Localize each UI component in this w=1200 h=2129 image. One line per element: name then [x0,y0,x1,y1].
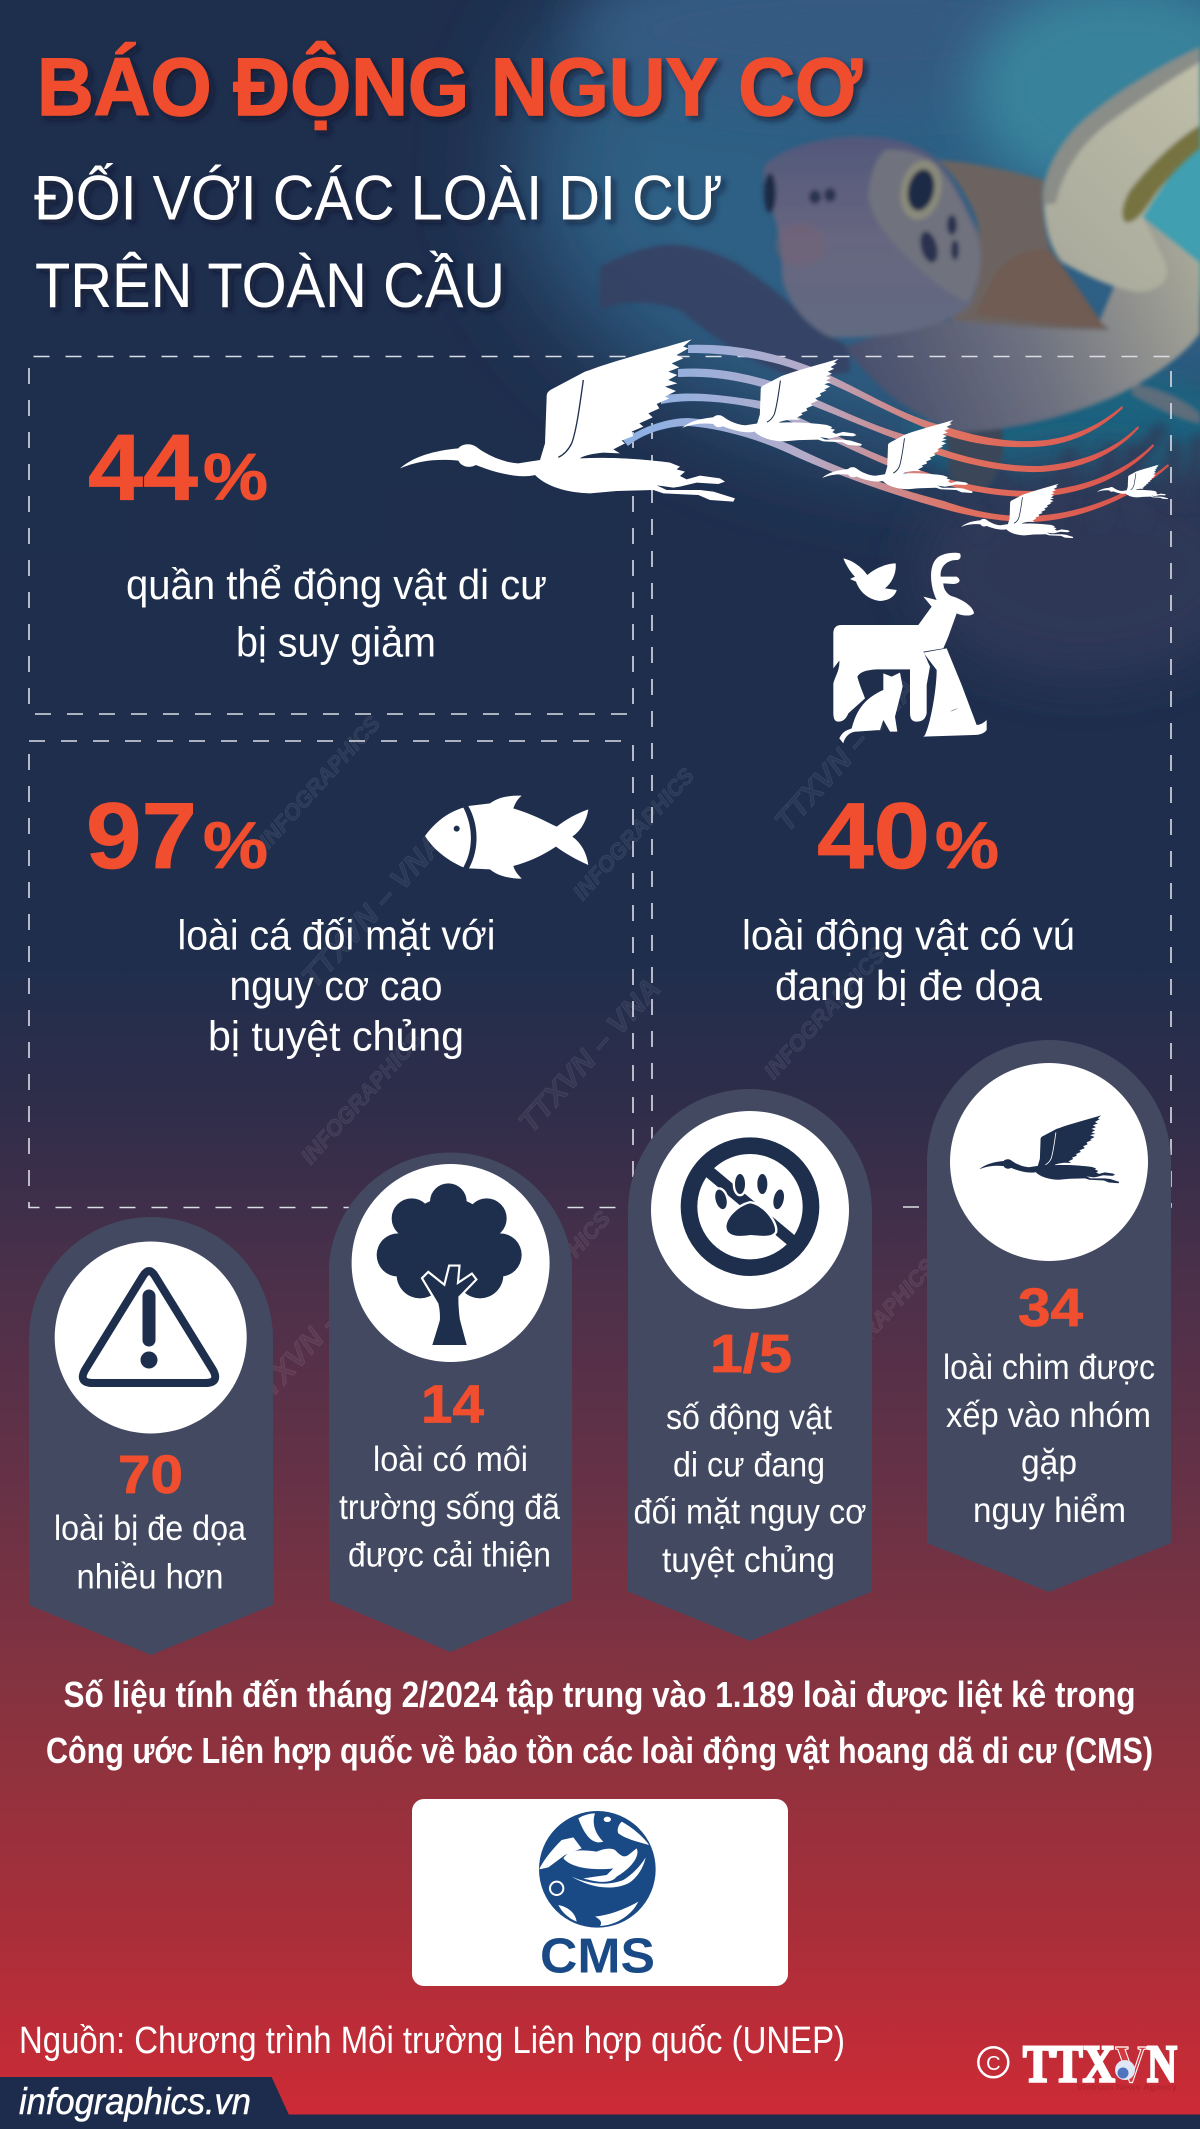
stat: 40% mammals threatened [742,783,1075,1009]
stat: 97% fish species at risk: % [203,808,268,882]
stat: 97% fish species at risk: 97 [86,783,197,888]
card: 70 species [29,1217,273,1655]
flight streaks behind the birds [623,345,1169,522]
logo: TTXVN [978,2036,1178,2094]
stat: 40% mammals threatened: loài động vật có vú [742,912,1075,959]
logo: TTXVN: V [1115,2036,1147,2094]
photo: sea turtle underwater [520,0,1200,680]
card: 34 bird species: gặp [1021,1443,1077,1482]
watermarks: INFOGRAPHICS [484,1206,615,1348]
icon: banned paw [651,1111,849,1309]
stat: 97% fish species at risk: nguy cơ cao [230,962,442,1009]
icon: CMS emblem [539,1811,656,1928]
icon: flying bird 4 [961,484,1073,538]
icon: warning triangle [55,1242,247,1434]
stat: 97% fish species at risk: loài cá đối mặt với [178,912,496,959]
card: 70 species: nhiều hơn [76,1558,224,1596]
card: 14 species: được cải thiện [348,1536,551,1574]
card: 1/5 of migratory animals: tuyệt chủng [662,1541,835,1580]
card: 34 bird species: xếp vào nhóm [946,1396,1151,1435]
footer bar with site name [0,2077,1200,2129]
watermarks: TTXVN – VNA [768,671,923,838]
stat: 40% mammals threatened: 40 [817,783,930,888]
stat: 97% fish species at risk: bị tuyệt chủng [208,1013,464,1060]
title: TRÊN TOÀN CẦU [35,250,505,321]
card: 1/5 of migratory animals: đối mặt nguy cơ [634,1492,866,1532]
panel: CMS logo: CMS [540,1930,655,1984]
icon: flying bird 5 [1097,465,1168,499]
title: BÁO ĐỘNG NGUY CƠ [37,42,862,133]
source line: Nguồn: Chương trình Môi trường Liên hợp quốc (UNEP) [19,2020,845,2062]
stat: 40% mammals threatened: % [935,808,999,882]
footer bar with site name: infographics.vn [19,2081,251,2122]
card: 34 bird species: loài chim được [943,1348,1155,1387]
stat: 44% migratory populations declining: bị suy giảm [236,618,436,666]
card: 70 species: 70 [118,1445,183,1505]
icon: flying bird 2 [682,359,862,446]
stat: 97% fish species at risk [86,783,496,1060]
icon: tree [352,1164,550,1362]
logo: TTXVN: C [986,2053,1001,2075]
watermarks: INFOGRAPHICS [568,763,699,905]
stat: 44% migratory populations declining: 44 [88,414,198,520]
icon: large flying bird [400,339,735,502]
watermarks: TTXVN – VNA [512,972,667,1139]
dashed panel: 44% frame [29,356,1171,1207]
logo: TTXVN: TTX [1023,2036,1115,2094]
watermarks: INFOGRAPHICS [296,1027,427,1169]
watermarks: INFOGRAPHICS [809,1254,940,1396]
watermarks: TTXVN – VNA [240,1250,395,1417]
panel: CMS logo [412,1799,788,1986]
card: 1/5 of migratory animals: di cư đang [673,1446,825,1484]
icon: fish [425,796,588,879]
title: ĐỐI VỚI CÁC LOÀI DI CƯ [34,162,723,234]
icon: animals group [833,553,987,743]
watermarks: TTXVN – VNA [688,1181,843,1348]
card: 14 species [329,1153,572,1652]
card: 14 species: loài có môi [373,1440,528,1479]
card: 34 bird species: 34 [1018,1278,1083,1338]
card: 34 bird species: nguy hiểm [973,1491,1126,1530]
dashed panel: 97% frame [29,741,633,1208]
card: 1/5 of migratory animals: 1/5 [710,1324,792,1384]
card: 1/5 of migratory animals [628,1089,872,1641]
title [34,42,862,321]
logo: TTXVN: N [1147,2036,1177,2094]
card: 34 bird species [927,1040,1171,1592]
stat: 40% mammals threatened: đang bị đe dọa [775,962,1043,1009]
card: 14 species: 14 [421,1374,484,1434]
watermarks [240,671,940,1417]
watermarks: TTXVN – VNA [295,827,450,994]
card: 1/5 of migratory animals: số động vật [666,1398,832,1437]
stat: 44% migratory populations declining: quần thể động vật di cư [126,561,547,608]
icon: flying bird 3 [822,420,973,493]
logo: TTXVN: Vietnam News Agency [1077,2083,1178,2092]
card: 14 species: trường sống đã [339,1488,560,1527]
icon: bird in circle [950,1063,1148,1261]
card: 70 species: loài bị đe dọa [54,1509,246,1548]
watermarks: INFOGRAPHICS [254,711,385,853]
stat: 44% migratory populations declining: % [203,440,268,514]
stat: 44% migratory populations declining [88,414,547,666]
note: data scope [46,1674,1153,1771]
watermarks: INFOGRAPHICS [759,942,890,1084]
